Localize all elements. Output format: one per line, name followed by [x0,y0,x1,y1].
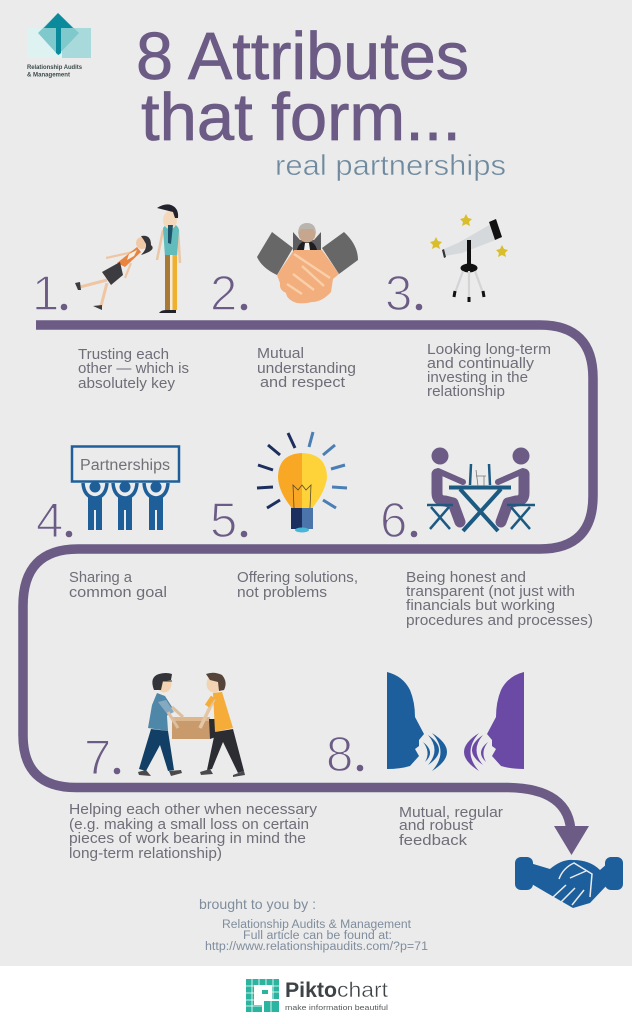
number 6: 6 [380,494,407,548]
title [136,19,469,155]
icon: two faces in dialogue [387,672,524,771]
number 3: 3 [385,267,412,321]
icon: Piktochart logo [246,979,279,1012]
text: attribute 5 [237,569,358,601]
icon: telescope and stars [430,214,508,302]
text: attribute 8: feedback [399,832,468,849]
credits text: brought to you by : [199,896,316,912]
text: attribute 2: understanding [257,360,356,377]
text: attribute 8: and robust [399,817,474,834]
title: that form... [141,80,461,155]
footer band: Piktochart: make information beautiful [285,1003,388,1012]
text: attribute 7: long-term relationship) [69,845,222,862]
text: attribute 6 [406,569,593,629]
icon: trust fall figures [75,204,180,313]
logo: Relationship Audits & Management: & Management [27,72,70,78]
title: 8 Attributes [136,19,469,94]
text: attribute 1: other — which is [78,360,189,377]
text: attribute 6: financials but working [406,597,555,614]
number 1: 1 [32,267,59,321]
footer band: Piktochart [0,966,632,1024]
text: attribute 3: Looking long-term [427,341,551,358]
text: attribute 6: procedures and processes) [406,612,593,629]
icon: three people holding Partnerships sign [72,446,179,530]
text: attribute 2: Mutual [257,345,304,362]
text: attribute 3: relationship [427,383,505,400]
text: attribute 5: not problems [237,584,327,601]
credits text: http://www.relationshipaudits.com/?p=71 [205,941,428,953]
credits text: Full article can be found at: [243,930,392,942]
icon: handshake with judge [257,223,358,303]
text: attribute 3 [427,341,551,400]
text: attribute 7: Helping each other when necessary [69,801,318,818]
icon: two people at table with laptops [427,448,535,531]
logo: Relationship Audits & Management [27,13,91,78]
credits text [199,896,428,953]
subtitle: real partnerships [275,150,506,182]
text: attribute 5: Offering solutions, [237,569,358,586]
text: attribute 1 [78,346,189,392]
text: attribute 3: investing in the [427,369,528,386]
text: attribute 2: and respect [260,374,346,391]
text: attribute 6: Being honest and [406,569,526,586]
text: attribute 7 [69,801,318,862]
footer band: Piktochart: chart [337,979,388,1002]
text: attribute 2 [257,345,356,391]
credits text: Relationship Audits & Management [222,919,412,931]
number 5: 5 [210,494,237,548]
woman [106,252,133,278]
winding path arrow [23,325,593,855]
man [157,230,180,263]
number 2: 2 [210,267,237,321]
text: attribute 7: (e.g. making a small loss on certain [69,816,309,833]
text: attribute 8 [399,804,503,849]
text: attribute 8: Mutual, regular [399,804,503,821]
icon: light bulb [257,432,347,532]
text: attribute 4: common goal [69,584,167,601]
icon: two men carrying a box [138,673,245,777]
logo: Relationship Audits & Management: Relationship Audits [27,64,83,71]
text: attribute 6: transparent (not just with [406,583,575,600]
number 7: 7 [84,731,111,785]
text: attribute 7: pieces of work bearing in mind the [69,830,306,847]
number 4: 4 [36,494,63,548]
number 8: 8 [326,728,353,782]
text: attribute 1: absolutely key [78,375,176,392]
text: attribute 4 [69,569,167,601]
text: attribute 4: Sharing a [69,569,133,586]
icon: final handshake [515,857,623,908]
text: attribute 3: and continually [427,355,535,372]
text: attribute 1: Trusting each [78,346,169,363]
icon: three people holding Partnerships sign: Partnerships [80,457,170,474]
footer band: Piktochart: Pikto [285,979,337,1002]
